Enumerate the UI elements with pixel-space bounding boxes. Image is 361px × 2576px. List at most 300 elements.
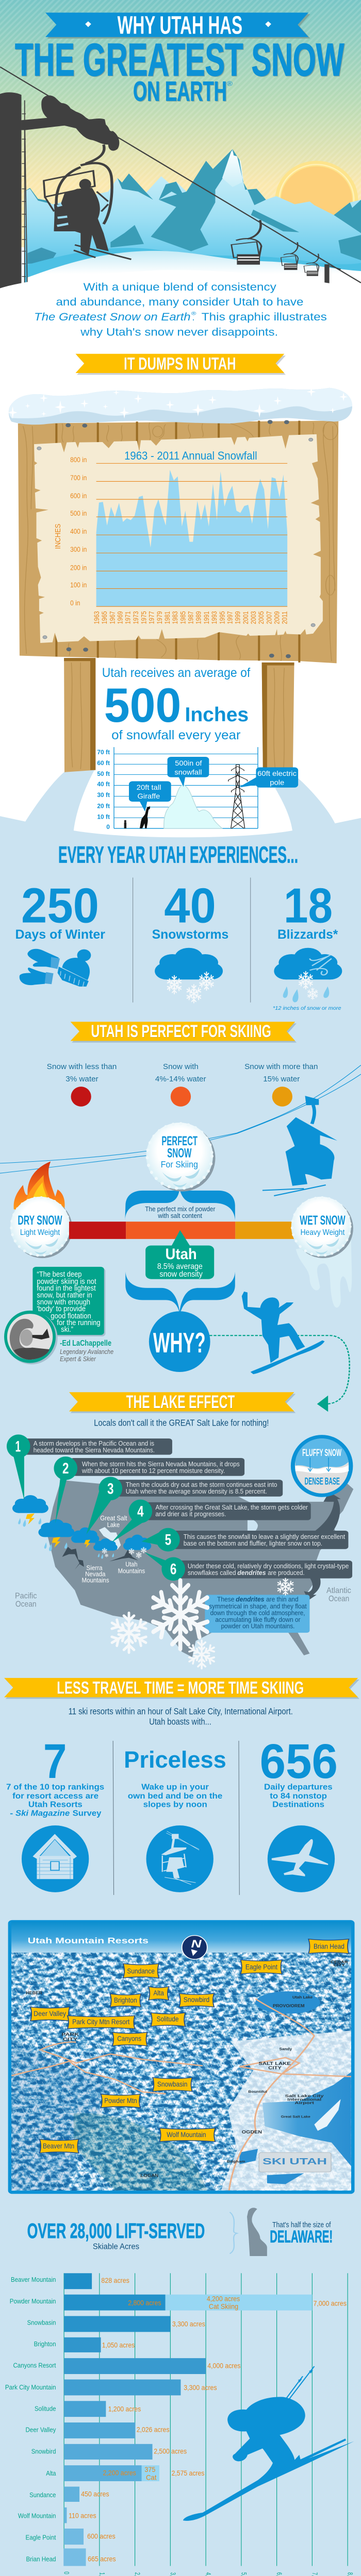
- map labels: Sierra: [86, 1564, 103, 1572]
- acres chart resort labels: Brian Head: [26, 2555, 56, 2563]
- chart x axis years: 2003: [250, 611, 257, 624]
- resort sign: powder mountain: Powder Mtn: [104, 2097, 137, 2105]
- title: on earth: ON EARTH: [133, 76, 227, 107]
- perfect mix caption: The perfect mix of powder: [145, 1205, 215, 1213]
- chart x axis years: 1985: [179, 611, 187, 624]
- title: on earth: ®: [227, 80, 233, 88]
- legend: snow water content: 15% water: [263, 1075, 300, 1083]
- step 6: dendrites: [237, 1569, 266, 1577]
- step 2: [54, 1456, 244, 1523]
- map labels: Great Salt: [100, 1515, 127, 1522]
- quote panel: snow, but rather in: [37, 1291, 92, 1299]
- acres chart value labels: 375: [144, 2466, 155, 2473]
- map place names: Utah Lake: [292, 1995, 313, 1999]
- stat: 656: Daily departures: [264, 1782, 333, 1791]
- stat: 7: 7 of the 10 top rankings: [6, 1782, 104, 1791]
- acres chart value labels: 3,300 acres: [172, 2320, 205, 2328]
- resort sign: snowbasin: Snowbasin: [157, 2080, 187, 2088]
- height comparison chart: 40 ft: [97, 781, 110, 788]
- map labels: Mountains: [81, 1577, 109, 1584]
- chairlift tower and ladder: [0, 92, 27, 291]
- snowball: perfect snow for skiing: For Skiing: [161, 1160, 198, 1170]
- why circle: WHY?: [153, 1328, 206, 1359]
- acres chart value labels: 1,200 acres: [108, 2405, 141, 2413]
- callout: giraffe: 20ft tall: [137, 784, 161, 792]
- acres chart value labels: 1,050 acres: [102, 2341, 135, 2349]
- chart x axis years: 2005: [257, 611, 265, 624]
- bottom curly brace: [125, 1272, 235, 1312]
- acres chart value labels: 110 acres: [69, 2512, 96, 2520]
- snow cap on sign: [8, 387, 352, 425]
- ocean labels: Ocean: [329, 1594, 349, 1603]
- perfect mix caption: with salt content: [157, 1212, 203, 1220]
- map place names: [26, 1991, 324, 2178]
- subheading: skiable acres: Skiable Acres: [93, 2242, 139, 2251]
- chart x axis years: 1969: [116, 611, 124, 624]
- quote panel: snow with enough: [37, 1298, 90, 1307]
- legend: snow water content: Snow with more than: [244, 1062, 318, 1071]
- quote panel: found in the lightest: [37, 1284, 96, 1293]
- travel intro text: [69, 1707, 293, 1727]
- quote attribution: [60, 1338, 113, 1363]
- step 6: snowflakes called: [188, 1569, 236, 1577]
- torn paper chart panel: [34, 434, 323, 643]
- stat: priceless: Priceless: [124, 1747, 226, 1773]
- rivets: [65, 420, 291, 658]
- chart y axis labels: 0 in: [70, 599, 80, 607]
- intro text: why Utah's snow never disappoints.: [80, 326, 278, 338]
- chart y axis labels: INCHES: [54, 524, 62, 549]
- height comparison chart: 30 ft: [97, 792, 110, 799]
- callout: 500in of snowfall: 500in of: [175, 759, 202, 767]
- legend: snow water content: Snow with less than: [47, 1062, 117, 1071]
- resort sign: deer valley: [30, 2007, 70, 2021]
- fluffy snow diagram: [291, 1435, 353, 1497]
- map labels: Lake: [107, 1521, 120, 1529]
- column dividers: [113, 1741, 239, 1895]
- chart x axis years: [93, 611, 289, 624]
- dendrites explanation box: powder on Utah mountains.: [221, 1622, 294, 1630]
- snowball: wet snow: [291, 1197, 353, 1258]
- chart x axis years: 1987: [187, 611, 195, 624]
- height comparison chart: [97, 747, 258, 831]
- icon: blizzard cloud: [274, 948, 342, 1003]
- chart y axis labels: 200 in: [70, 564, 87, 572]
- stat: 7: Ski Magazine: [15, 1808, 70, 1818]
- step 3: 3: [107, 1480, 114, 1497]
- stat: priceless: own bed and be on the: [128, 1791, 222, 1800]
- melting wet snow: [296, 1240, 352, 1308]
- intro text: This graphic illustrates: [202, 311, 327, 323]
- title ribbon: [45, 11, 310, 39]
- resort sign: park city: Park City Mtn Resort: [72, 2018, 130, 2026]
- top curly brace: [125, 1190, 235, 1220]
- white panel behind statistic: [96, 660, 261, 773]
- section ribbon: it dumps in utah: [75, 354, 286, 375]
- chart x axis years: 2011: [281, 611, 289, 624]
- footnote: *12 inches of snow or more: [273, 1005, 341, 1011]
- stat: 250 days of winter: 250: [21, 878, 99, 933]
- ocean labels: Atlantic: [326, 1586, 351, 1595]
- acres chart value labels: 7,000 acres: [314, 2299, 347, 2308]
- acres chart resort labels: Park City Mountain: [5, 2383, 56, 2391]
- map place names: CITY: [63, 2037, 78, 2042]
- ski lift cable lines: [0, 1065, 361, 1173]
- stat: 18 blizzards: Blizzards*: [277, 927, 338, 941]
- height comparison chart: 10 ft: [97, 814, 110, 820]
- chart y axis labels: 500 in: [70, 510, 87, 518]
- map place names: International: [287, 2097, 321, 2102]
- resort sign: deer valley: Deer Valley: [34, 2010, 66, 2018]
- snowball: dry snow: DRY SNOW: [18, 1213, 62, 1227]
- quote attribution: -Ed LaChappelle: [60, 1338, 111, 1348]
- chart x axis years: 1993: [210, 611, 218, 624]
- acres chart resort labels: Eagle Point: [26, 2534, 56, 2541]
- utah density callout: Utah: [166, 1246, 197, 1263]
- icon: mittens and hat: [20, 949, 91, 987]
- statistic: 500 inches: of snowfall every year: [111, 728, 241, 742]
- resort sign: canyons: Canyons: [117, 2035, 141, 2043]
- resort sign: beaver mountain: [40, 2139, 79, 2153]
- step 2: When the storm hits the Sierra Nevada Mountains, it drops: [82, 1461, 240, 1468]
- chart x axis years: 1967: [108, 611, 117, 624]
- quote panel: 'body' to provide: [37, 1304, 86, 1313]
- resort sign: wolf mountain: Wolf Mountain: [167, 2131, 206, 2139]
- map place names: PARK: [61, 2032, 79, 2037]
- acres chart value labels: 2,575 acres: [172, 2469, 204, 2477]
- statistic: 500 inches: Inches: [185, 703, 249, 726]
- chart y axis labels: 700 in: [70, 474, 87, 482]
- pale blue page background: [0, 850, 361, 2576]
- map place names: Sandy: [280, 2047, 292, 2051]
- acres chart value labels: 600 acres: [87, 2532, 116, 2540]
- chart x axis years: 1991: [203, 611, 210, 624]
- step 1: [7, 1434, 172, 1500]
- resort sign: eagle point: Eagle Point: [245, 1963, 277, 1971]
- acres chart value labels: [69, 2277, 347, 2563]
- chart x axis years: 1979: [156, 611, 163, 624]
- chart x axis years: 1983: [171, 611, 179, 624]
- curved dark arrows: [304, 1492, 341, 1600]
- step 6: 6: [170, 1561, 176, 1578]
- portrait of Ed LaChappelle: [4, 1311, 58, 1364]
- north compass: N: [191, 1938, 202, 1950]
- map labels: Nevada: [85, 1570, 106, 1578]
- title ribbon: WHY UTAH HAS: [118, 11, 242, 39]
- utah density callout: snow density: [159, 1269, 203, 1279]
- stat: priceless: [124, 1747, 226, 1809]
- acres chart value labels: 4,200 acres: [207, 2295, 240, 2303]
- section ribbon: utah is perfect for skiing: [71, 1021, 297, 1043]
- section ribbon: the lake effect: [69, 1392, 296, 1413]
- acres chart value labels: 2,500 acres: [154, 2447, 187, 2455]
- quote panel: for the running: [57, 1318, 101, 1327]
- chart x axis years: 2007: [265, 611, 273, 624]
- resort sign: snowbird: [179, 1993, 214, 2007]
- snowball: perfect snow for skiing: PERFECT: [161, 1134, 198, 1148]
- snowball: perfect snow for skiing: [146, 1123, 215, 1192]
- snowboarder silhouette: [242, 1292, 324, 1374]
- chair with seated skier silhouette: [44, 145, 131, 259]
- stat: 7: 7: [43, 1734, 67, 1788]
- acres chart resort labels: Powder Mountain: [10, 2297, 56, 2305]
- step 2: 2: [62, 1460, 69, 1477]
- chart x axis years: 1997: [226, 611, 234, 624]
- resort sign: brian head: Brian Head: [314, 1942, 344, 1951]
- acres chart resort labels: Snowbird: [31, 2448, 56, 2455]
- acres chart value labels: Cat Skiing: [209, 2302, 238, 2311]
- resort sign: alta: Alta: [153, 1989, 164, 1997]
- step 3: [86, 1477, 283, 1534]
- callout: 500in of snowfall: [168, 757, 209, 787]
- map labels: Mountains: [118, 1567, 145, 1575]
- height comparison chart: 50 ft: [97, 771, 110, 777]
- resort sign: sundance: [123, 1963, 159, 1978]
- chairlift cable: [0, 67, 361, 283]
- map place names: HEBER: [26, 1991, 42, 1996]
- acres chart bars: [63, 2273, 312, 2566]
- chart x axis years: 2009: [273, 611, 281, 624]
- ocean labels: [15, 1586, 351, 1608]
- legend: snow water content: 4%-14% water: [155, 1075, 206, 1083]
- resort sign: wolf mountain: [159, 2128, 215, 2142]
- step 3: Then the clouds dry out as the storm continues east into: [126, 1481, 277, 1489]
- chart x axis years: 1973: [132, 611, 140, 624]
- acres chart x axis: [62, 2571, 355, 2576]
- icon: setting sun: [275, 161, 358, 239]
- height comparison chart: 20 ft: [97, 803, 110, 809]
- stat: 656: Destinations: [272, 1800, 324, 1809]
- stat: 18 blizzards: 18: [284, 878, 333, 933]
- callout: giraffe: [129, 781, 171, 811]
- paper pins: [37, 438, 315, 639]
- legend: snow water content: Snow with: [163, 1062, 199, 1071]
- chair lift silhouette: [262, 1096, 337, 1196]
- chart y axis labels: 100 in: [70, 581, 87, 589]
- step 2: with about 10 percent to 12 percent moisture density.: [81, 1467, 225, 1475]
- legend: snow water content: [47, 1062, 318, 1107]
- legend: snow water content: 3% water: [65, 1075, 99, 1083]
- map place names: SALT LAKE: [258, 2061, 291, 2066]
- resort sign: beaver mountain: Beaver Mtn: [43, 2142, 74, 2150]
- stat: 40 snowstorms: Snowstorms: [152, 927, 228, 941]
- resort sign: sundance: Sundance: [127, 1967, 155, 1975]
- stat: 7: Survey: [73, 1808, 102, 1818]
- step 3: Utah where the average snow density is 8.5 percent.: [126, 1488, 267, 1496]
- travel intro text: Utah boasts with...: [149, 1717, 211, 1727]
- acres chart value labels: 2,026 acres: [137, 2426, 170, 2434]
- icon: snowstorm cloud: [155, 948, 223, 1003]
- chart x axis years: 1975: [140, 611, 148, 624]
- map place names: PROVO/OREM: [273, 2004, 305, 2009]
- stat: 250 days of winter: [15, 878, 105, 941]
- resort sign: snowbasin: [153, 2077, 192, 2091]
- step 6: are produced.: [268, 1569, 305, 1577]
- chart x axis years: 1989: [195, 611, 203, 624]
- acres chart resort labels: Brighton: [34, 2341, 56, 2348]
- pale blue snow mound under the sign: [0, 770, 361, 856]
- section ribbon: it dumps in utah: IT DUMPS IN UTAH: [124, 354, 236, 374]
- acres chart resort labels: Canyons Resort: [13, 2362, 56, 2369]
- intro text: [34, 281, 327, 338]
- resort sign: snowbird: Snowbird: [184, 1996, 209, 2004]
- map label: cedar city: CEDAR: [331, 1960, 348, 1964]
- acres chart value labels: Cat: [146, 2473, 157, 2482]
- icon: log cabin: [22, 1825, 89, 1892]
- resort map frame: [8, 1920, 355, 2194]
- icon: delaware: [247, 2208, 267, 2256]
- acres chart value labels: 2,200 acres: [103, 2469, 136, 2477]
- resort sign: brighton: [110, 1994, 141, 2007]
- dotted arrow line: [209, 1335, 350, 1412]
- quote panel: “The best deep: [37, 1270, 81, 1279]
- acres chart gridlines: [64, 2273, 348, 2566]
- map place names: Brigham: [227, 2159, 245, 2163]
- acres chart value labels: 2,800 acres: [128, 2299, 161, 2307]
- acres chart resort labels: Alta: [46, 2469, 56, 2477]
- step 1: A storm develops in the Pacific Ocean and is: [34, 1440, 154, 1448]
- acres chart value labels: 450 acres: [81, 2490, 109, 2498]
- quote panel: [32, 1267, 105, 1336]
- snow density scale bar: [69, 1222, 294, 1239]
- step 4: 4: [137, 1503, 144, 1520]
- stat: 18 blizzards: [277, 878, 338, 941]
- callout: electric pole: pole: [270, 778, 284, 787]
- chart y axis labels: 800 in: [70, 456, 87, 464]
- quote attribution: Expert & Skier: [60, 1355, 96, 1363]
- north compass: [182, 1936, 207, 1959]
- utah density callout: 8.5% average: [157, 1262, 203, 1271]
- decorative brace: [230, 2212, 237, 2253]
- chart x axis years: 1999: [234, 611, 242, 624]
- icon: chairlift: [146, 1825, 214, 1892]
- snow hills: [24, 248, 361, 289]
- stat: 656: to 84 nonstop: [270, 1791, 327, 1800]
- storm clouds: [12, 1495, 151, 1559]
- chart x axis years: 1963: [93, 611, 101, 624]
- stat: 250 days of winter: Days of Winter: [15, 927, 105, 941]
- mountain range illustration: [24, 149, 361, 283]
- acres chart value labels: 4,000 acres: [207, 2362, 241, 2370]
- chart x axis years: 1971: [124, 611, 132, 624]
- dendrites explanation box: dendrites: [236, 1596, 265, 1603]
- sign posts: [64, 658, 294, 772]
- callout: electric pole: [238, 767, 298, 788]
- chairlift pulley arm: [22, 95, 119, 151]
- acres chart resort labels: Snowbasin: [27, 2319, 56, 2327]
- intro text: ®: [191, 311, 196, 316]
- resort sign: park city: [68, 2015, 135, 2029]
- quote panel: powder skiing is not: [37, 1277, 96, 1286]
- map label: cedar city: CITY: [333, 1963, 346, 1967]
- snowball: perfect snow for skiing: SNOW: [167, 1146, 192, 1160]
- why circle: [149, 1311, 210, 1372]
- foreground white snow: [0, 270, 361, 307]
- map place names: Salt Lake City: [285, 2094, 324, 2098]
- resort sign: brighton: Brighton: [114, 1996, 137, 2004]
- snowball: dry snow: [10, 1197, 72, 1258]
- map label: cedar city: [331, 1960, 348, 1967]
- quote panel: good flotation: [51, 1312, 91, 1320]
- acres chart resort labels: Wolf Mountain: [18, 2512, 56, 2520]
- intro text: With a unique blend of consistency: [84, 281, 276, 293]
- icon: airplane: [268, 1825, 335, 1892]
- stat: 656: [260, 1734, 338, 1809]
- snowflakes: [109, 1579, 294, 1669]
- page background: [0, 0, 361, 855]
- resort map painting: [11, 1922, 351, 2191]
- wooden sign: [18, 421, 338, 663]
- dendrites explanation box: down through the cold atmosphere,: [210, 1609, 305, 1617]
- stat: 40 snowstorms: [152, 878, 228, 941]
- ocean labels: Pacific: [15, 1591, 37, 1600]
- sky with diagonal stripes: [0, 0, 361, 247]
- resort sign: solitude: [151, 2013, 185, 2026]
- map place names: OGDEN: [242, 2130, 262, 2134]
- map place names: Airport: [294, 2100, 314, 2105]
- stat: priceless: Wake up in your: [141, 1782, 209, 1791]
- stat: priceless: slopes by noon: [143, 1800, 207, 1809]
- lake effect subtitle: Locals don't call it the GREAT Salt Lake for nothing!: [94, 1418, 269, 1428]
- resort sign: canyons: [112, 2032, 147, 2046]
- map labels: Utah: [125, 1561, 138, 1568]
- utah density callout: [145, 1230, 214, 1279]
- stat: 7: Utah Resorts: [28, 1800, 83, 1809]
- quote attribution: Legendary Avalanche: [60, 1348, 113, 1355]
- acres chart x axis: 0: [62, 2571, 71, 2574]
- statistic: 500 inches: [102, 666, 251, 742]
- dendrites explanation box: accumulating like fluffy down or: [215, 1616, 301, 1623]
- intro text: The Greatest Snow on Earth: [34, 311, 191, 323]
- statistic: 500 inches: 500: [104, 678, 181, 732]
- chart y axis labels: [54, 456, 87, 607]
- map place names: CITY: [268, 2065, 282, 2071]
- height comparison chart: 0: [106, 823, 110, 831]
- stat: 7: -: [10, 1808, 13, 1818]
- statistic: 500 inches: Utah receives an average of: [102, 666, 251, 680]
- intro text: and abundance, many consider Utah to have: [56, 296, 303, 308]
- delaware comparison text: That's half the size of: [272, 2221, 331, 2229]
- map place names: Great Salt Lake: [281, 2115, 310, 2119]
- acres chart value labels: 828 acres: [101, 2277, 129, 2285]
- column dividers: [133, 877, 251, 1003]
- step 6: [144, 1552, 352, 1581]
- chart y axis labels: 300 in: [70, 546, 87, 554]
- acres chart value labels: 3,300 acres: [184, 2384, 217, 2392]
- resort sign: brian head: [308, 1939, 349, 1954]
- ski utah badge: [259, 2153, 331, 2172]
- chart y axis labels: 600 in: [70, 492, 87, 500]
- step 1: 1: [15, 1438, 21, 1455]
- chart y axis labels: 400 in: [70, 528, 87, 536]
- snowball: dry snow: Light Weight: [20, 1228, 60, 1237]
- callout: giraffe: Giraffe: [138, 792, 160, 801]
- skier silhouette 1: [183, 2366, 354, 2521]
- acres chart value labels: 665 acres: [88, 2555, 116, 2563]
- chart x axis years: 1965: [101, 611, 108, 624]
- step 1: headed toward the Sierra Nevada Mountains.: [34, 1447, 155, 1454]
- chart x axis years: 1995: [218, 611, 226, 624]
- height comparison chart: 60 ft: [97, 760, 110, 767]
- resort sign: alta: [149, 1987, 169, 2000]
- step 4: and drier as it progresses.: [155, 1511, 226, 1518]
- chart x axis years: 2001: [242, 611, 250, 624]
- intro text: .: [192, 311, 194, 323]
- acres chart resort labels: Sundance: [29, 2492, 56, 2499]
- resort sign: eagle point: [241, 1960, 282, 1974]
- dendrites explanation box: are thin and: [266, 1596, 299, 1603]
- title: on earth: [133, 76, 233, 107]
